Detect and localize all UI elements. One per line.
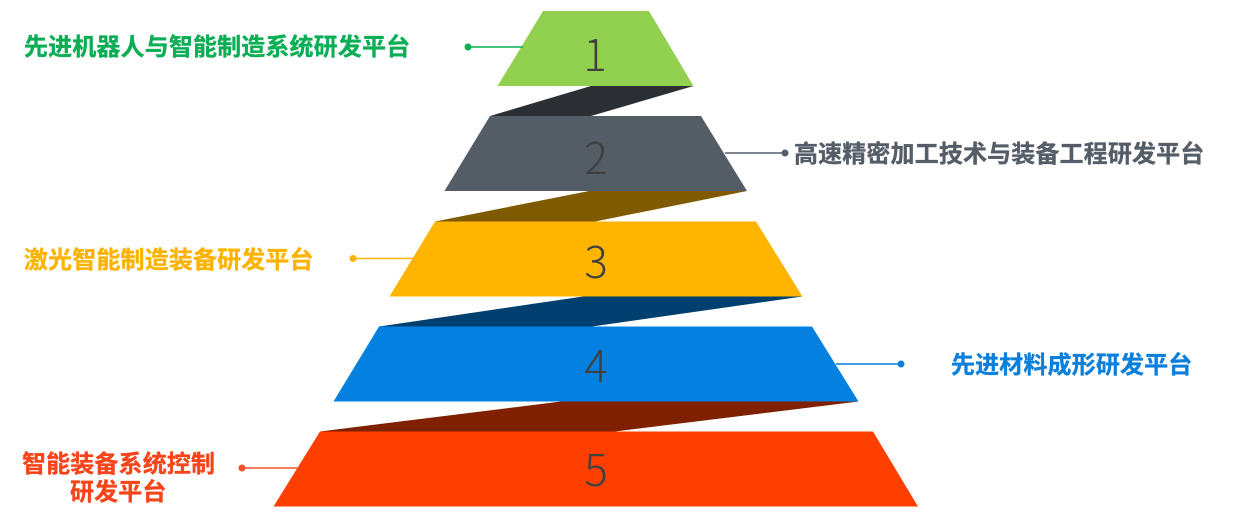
- connector band: tier 4 to 5: [320, 402, 858, 432]
- callout 1: [24, 33, 523, 61]
- leader line 5: [238, 464, 299, 472]
- label 2: 高速精密加工技术与装备工程研发平台: [794, 140, 1204, 168]
- tier 1: [498, 11, 694, 86]
- callout 3: [24, 246, 414, 274]
- callout 4: [836, 351, 1192, 379]
- leader line 1: [464, 44, 523, 50]
- tier 2: [444, 116, 747, 191]
- connector band: tier 2 to 3: [435, 191, 747, 222]
- tier 4: [334, 326, 858, 402]
- leader line 4: [836, 360, 904, 368]
- number 2: 2: [584, 123, 608, 187]
- number 5: 5: [584, 435, 608, 499]
- tier 3: [390, 222, 802, 296]
- connector band: tier 3 to 4: [379, 296, 802, 326]
- label 5: 研发平台: [70, 478, 167, 506]
- number 3: 3: [584, 227, 608, 291]
- number 4: 4: [584, 331, 608, 395]
- leader line 3: [350, 255, 414, 262]
- callout 5: [22, 451, 299, 506]
- label 5: 智能装备系统控制: [22, 451, 215, 478]
- label 3: 激光智能制造装备研发平台: [24, 246, 314, 274]
- number 1: 1: [583, 20, 607, 84]
- leader line 2: [725, 150, 788, 156]
- callout 2: [725, 140, 1204, 168]
- connector band: tier 1 to 2: [490, 86, 694, 116]
- label 4: 先进材料成形研发平台: [951, 351, 1192, 379]
- label 1: 先进机器人与智能制造系统研发平台: [24, 33, 410, 61]
- tier 5: [274, 432, 918, 506]
